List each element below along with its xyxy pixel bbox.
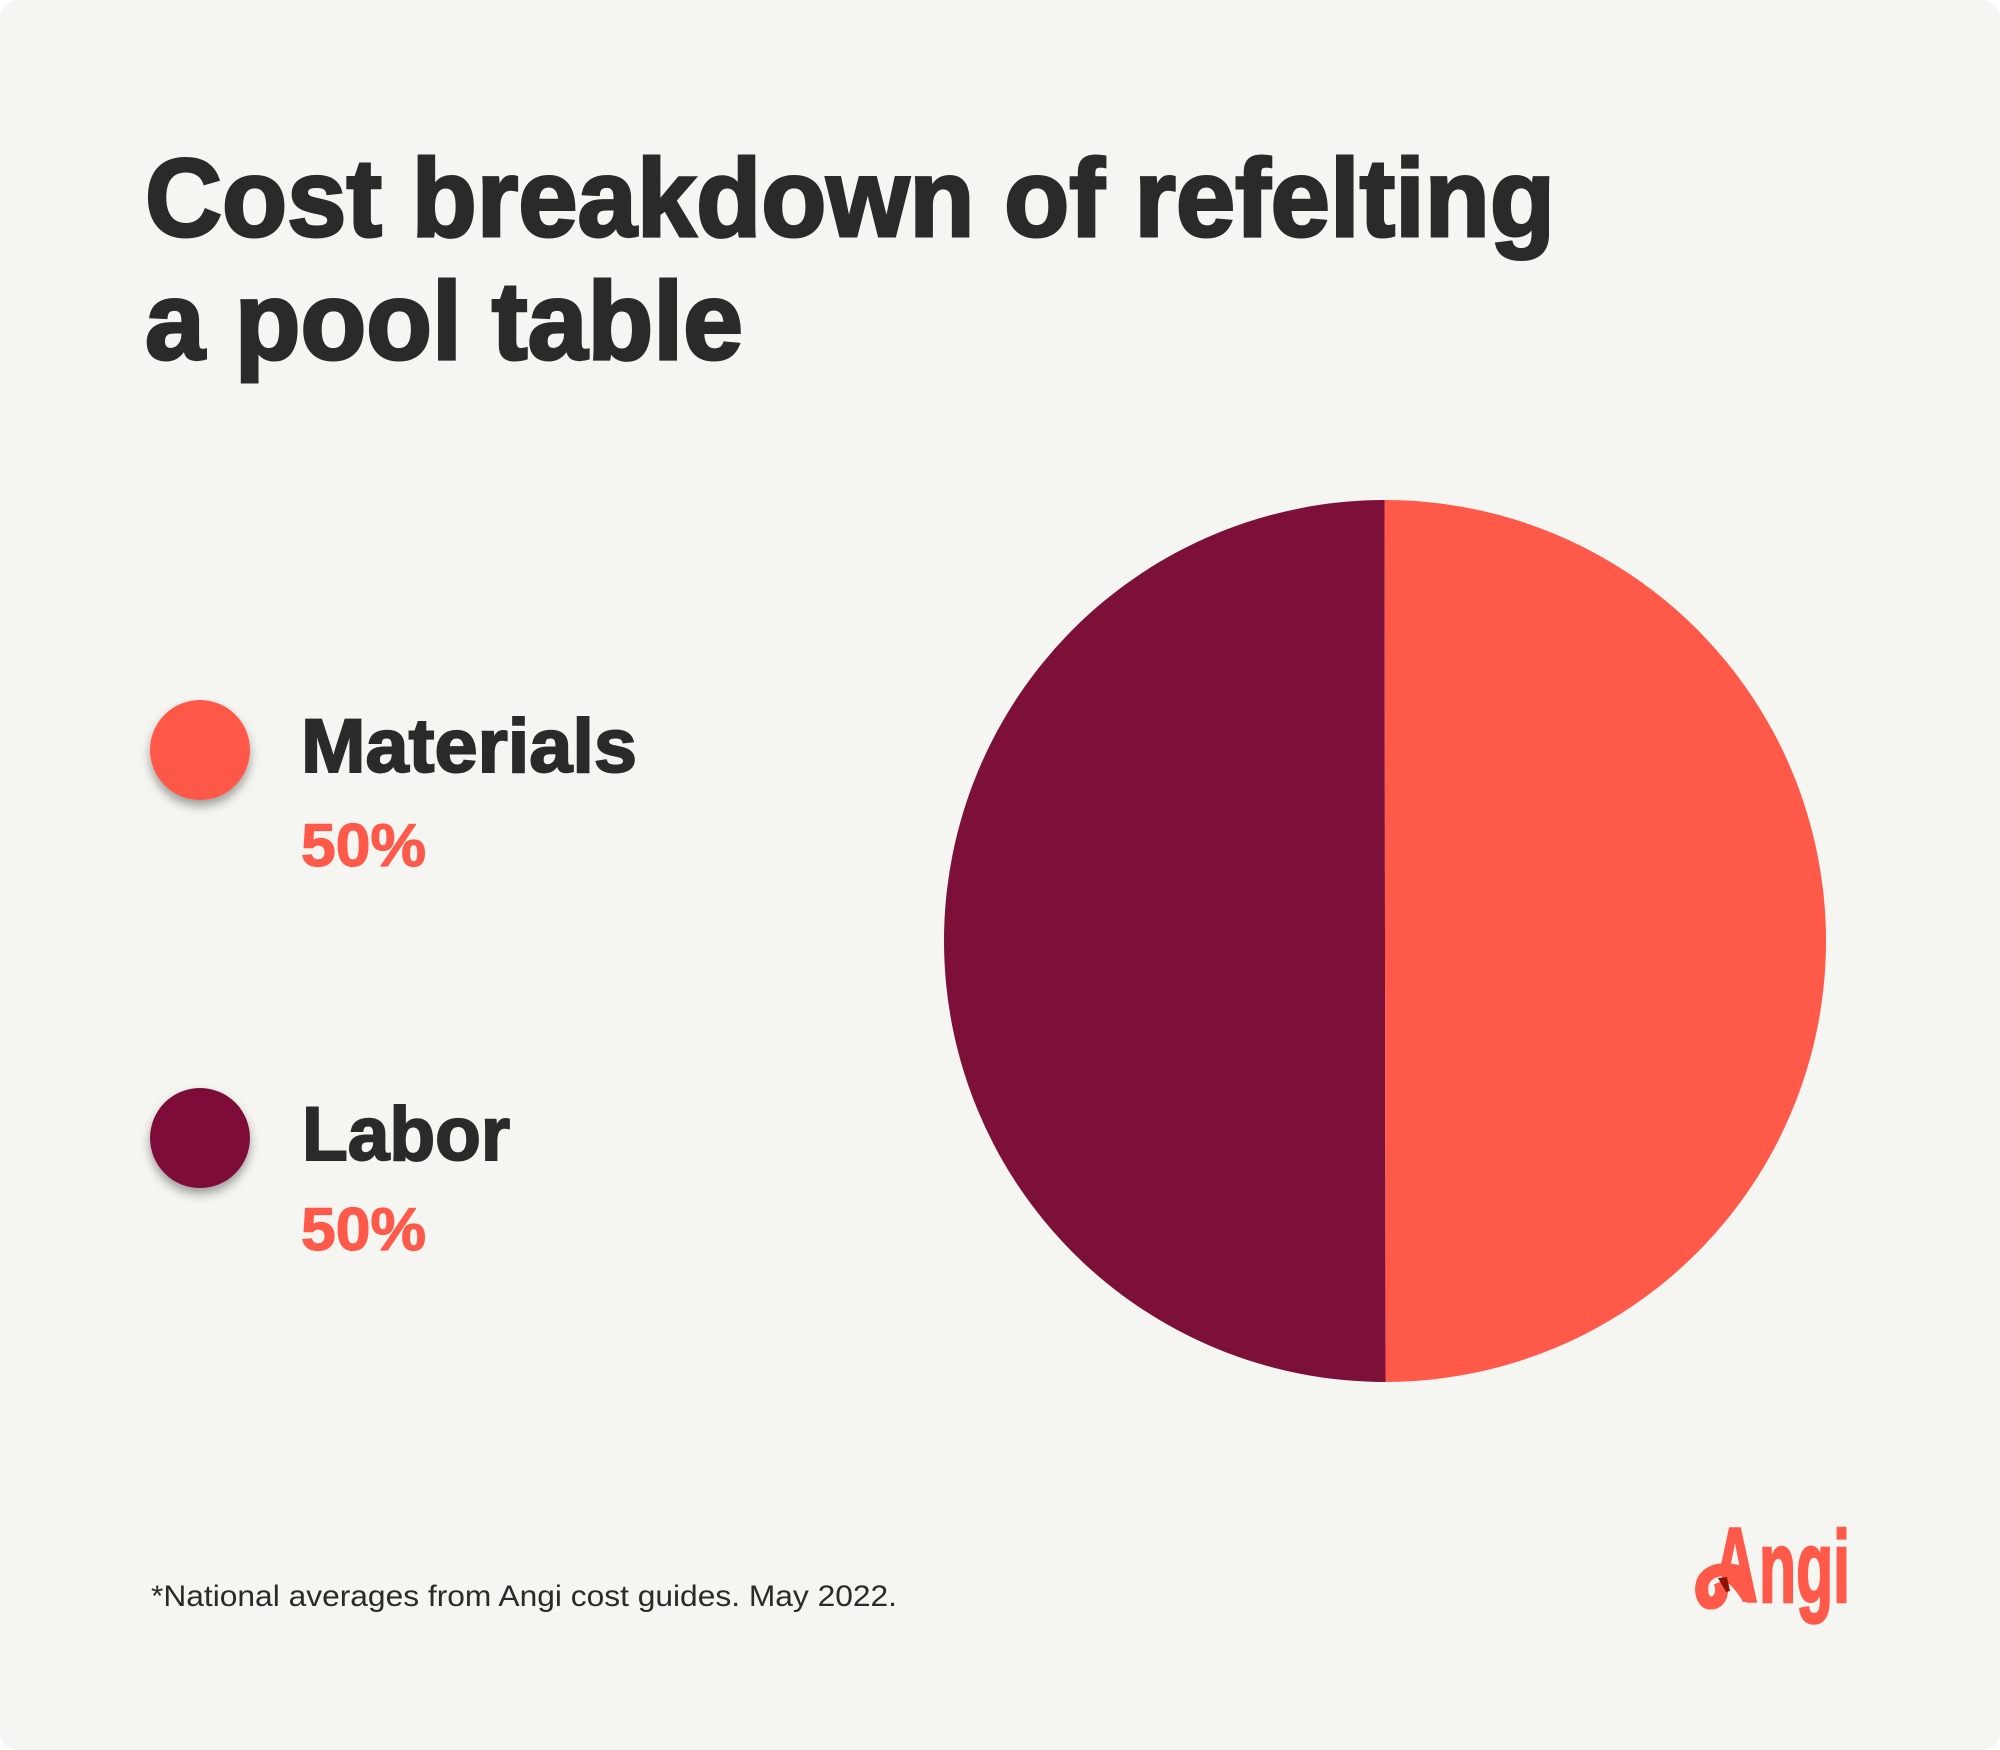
pie slice: labor 50%: [944, 500, 1386, 1382]
title: a pool table: [145, 260, 743, 383]
footnote: *National averages from Angi cost guides. May 2022.: [151, 1580, 897, 1613]
legend swatch: labor: [150, 1088, 250, 1188]
legend item: labor: [150, 1088, 510, 1263]
title: Cost breakdown of refelting: [145, 137, 1555, 260]
logo: Angi: ngi: [1759, 1510, 1850, 1624]
legend value: materials: 50%: [301, 812, 426, 879]
legend label: labor: Labor: [302, 1092, 510, 1177]
title: [145, 137, 1555, 383]
legend label: materials: Materials: [301, 704, 637, 789]
pie chart: [944, 500, 1826, 1382]
pie slice: materials 50%: [1384, 500, 1826, 1382]
logo: Angi: [1695, 1526, 1846, 1625]
logo: Angi: A: [1712, 1505, 1758, 1625]
legend value: labor: 50%: [301, 1196, 426, 1263]
legend item: materials: [150, 700, 637, 879]
legend swatch: materials: [150, 700, 250, 800]
